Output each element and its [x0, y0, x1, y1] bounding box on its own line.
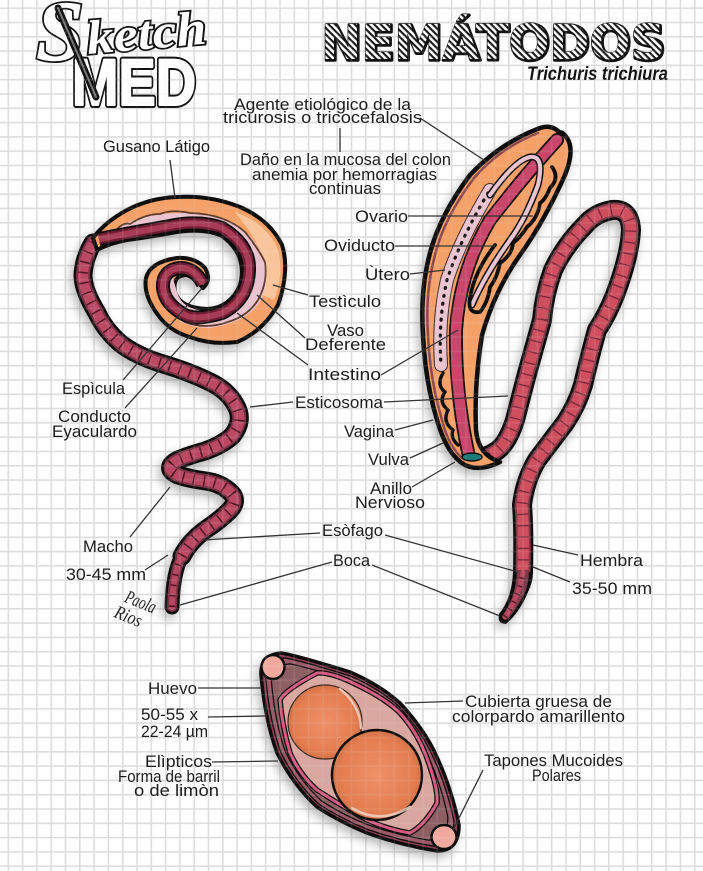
label: daño en la mucosa — [240, 150, 451, 198]
nerve ring — [462, 453, 482, 461]
label: gusano látigo: Gusano Látigo — [103, 137, 210, 156]
egg outer shell — [261, 653, 459, 851]
egg shell middle band — [266, 658, 454, 846]
label: cubierta gruesa: colorpardo amarillento — [452, 707, 625, 726]
label: macho: Macho — [83, 537, 133, 556]
label: oviducto: Oviducto — [324, 236, 395, 255]
gut — [99, 223, 249, 317]
label: elípticos: o de limòn — [134, 781, 219, 800]
male worm illustration — [83, 197, 285, 607]
male coiled body — [93, 197, 285, 343]
label: female length: 35-50 mm — [572, 579, 652, 598]
label: vagina: Vagina — [344, 422, 395, 441]
label: hembra: Hembra — [580, 551, 644, 570]
label: vulva: Vulva — [368, 450, 410, 469]
label: tapones mucoides — [484, 751, 623, 785]
label: cubierta gruesa — [452, 692, 625, 726]
logo: SketchMED — [36, 0, 209, 119]
male worm tail and body — [83, 243, 239, 607]
label: vaso deferente: Vaso — [327, 321, 364, 340]
title: NEMÁTODOS — [322, 15, 666, 72]
lower cell highlight — [352, 807, 410, 816]
female long posterior body — [475, 210, 631, 572]
female inner wall — [427, 133, 538, 458]
light band on the right of the coil — [235, 212, 280, 300]
logo: SketchMED: MED — [72, 45, 196, 119]
logo: SketchMED: ketch — [84, 2, 209, 65]
label: agente etiológico: Agente etiológico de la — [234, 95, 412, 114]
lower polar plug — [432, 825, 456, 849]
label: anillo nervioso: Anillo — [370, 479, 412, 498]
label: vaso deferente: Deferente — [305, 335, 386, 354]
female worm illustration — [422, 127, 631, 624]
label: conducto eyaculador: Conducto — [58, 407, 131, 426]
signature — [110, 585, 159, 635]
label: huevo: Huevo — [148, 679, 197, 698]
label: conducto eyaculador — [52, 407, 137, 441]
uterus squiggle — [469, 167, 556, 312]
egg inner membrane — [280, 673, 437, 833]
female anterior body — [422, 127, 571, 468]
lower yolk cell — [332, 730, 422, 820]
upper yolk cell — [288, 685, 362, 759]
oviduct loop — [472, 157, 540, 305]
ovary — [440, 190, 490, 365]
subtitle: Trichuris trichiura — [527, 64, 668, 85]
logo: SketchMED: ketch — [84, 2, 209, 65]
label: boca: Boca — [333, 551, 371, 570]
label: egg size: 50-55 x — [141, 705, 199, 724]
testis — [118, 213, 266, 328]
label: anillo nervioso: Nervioso — [355, 493, 425, 512]
upper polar plug — [262, 655, 284, 679]
label: conducto eyaculador: Eyaculardo — [52, 422, 137, 441]
label: esófago: Esòfago — [322, 521, 383, 540]
female tapered tail tip — [499, 570, 533, 624]
label: elípticos: Elìpticos — [145, 752, 212, 771]
label: intestino: Intestino — [308, 365, 381, 384]
label: tapones mucoides: Polares — [532, 766, 581, 785]
testis contour — [118, 211, 266, 326]
label: daño en la mucosa: anemia por hemorragias — [252, 165, 437, 184]
title: NEMÁTODOS — [321, 14, 665, 71]
label: elípticos — [118, 752, 220, 800]
label: male length: 30-45 mm — [66, 565, 146, 584]
label: espícula: Espìcula — [62, 379, 126, 398]
vagina squiggle — [440, 373, 458, 445]
label: agente etiológico — [223, 95, 422, 127]
signature: Paola — [121, 586, 159, 618]
label: egg size — [141, 705, 208, 741]
label: esticosoma: Esticosoma — [295, 393, 384, 412]
label: elípticos: Forma de barril — [118, 767, 220, 786]
signature: Rios — [110, 602, 145, 632]
label: agente etiológico: tricurosis o tricocefalosis — [223, 108, 422, 127]
label: útero: Ùtero — [365, 265, 410, 284]
logo: SketchMED: MED — [72, 45, 196, 119]
label: cubierta gruesa: Cubierta gruesa de — [465, 692, 612, 711]
intestine — [456, 140, 557, 452]
label: tapones mucoides: Tapones Mucoides — [484, 751, 623, 770]
leader lines — [123, 118, 578, 830]
label: vaso deferente — [305, 321, 386, 354]
upper cell highlight — [340, 689, 361, 728]
label: daño en la mucosa: Daño en la mucosa del colon — [240, 150, 451, 169]
label: testículo: Testìculo — [309, 292, 381, 311]
label: ovario: Ovario — [355, 207, 408, 226]
label: anillo nervioso — [355, 479, 425, 512]
label: egg size: 22-24 µm — [141, 722, 208, 741]
egg illustration — [261, 653, 459, 851]
egg shell inner band — [272, 664, 448, 840]
label: daño en la mucosa: continuas — [309, 179, 381, 198]
